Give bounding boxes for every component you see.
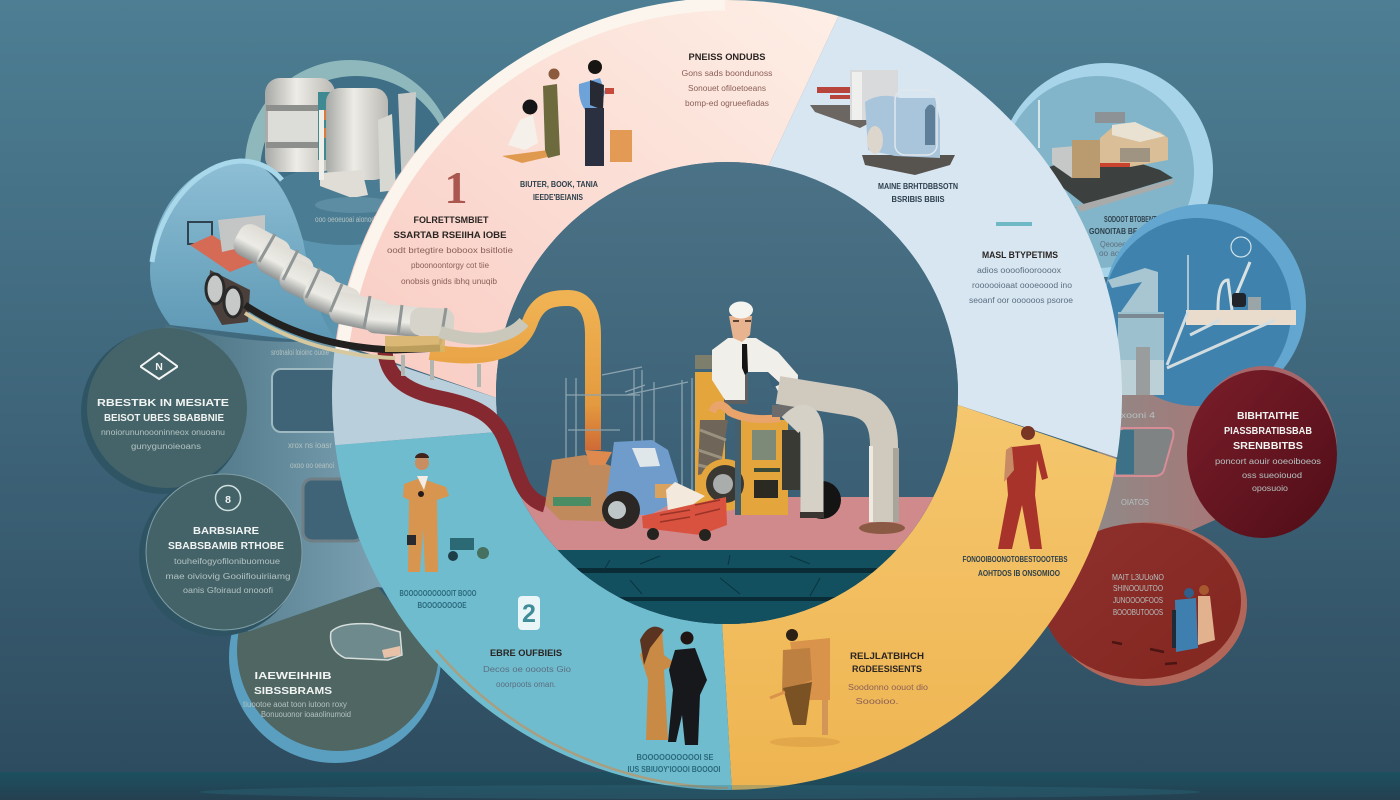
panel: left dark circle one <box>81 328 247 494</box>
number two badge: 2 <box>522 600 536 628</box>
icon: worker torso <box>712 302 798 417</box>
icon: yellow loader <box>695 355 841 519</box>
text: yellow top caption <box>962 555 1068 578</box>
text: pale blue block: MASL BTYPETIMS <box>982 250 1058 261</box>
icon: inner gray pipe <box>790 416 812 515</box>
text: pale blue block: roooooioaat oooeoood ino <box>972 281 1073 290</box>
icon: scaffold frames <box>566 367 692 520</box>
icon: hexagon badge: N <box>155 361 163 373</box>
panel: dark red circle: PIASSBRATIBSBAB <box>1224 425 1312 437</box>
panel: right connector band: exooni 4 <box>1115 411 1156 420</box>
bottom glow <box>200 785 1200 799</box>
floor <box>520 497 933 550</box>
panel: dark red circle: oposuoio <box>1252 484 1289 493</box>
text: people caption: IEEDE'BEIANIS <box>533 193 584 202</box>
panel: left dark circle one: gunygunoieoans <box>131 442 201 451</box>
text: step one: oodt brtegtire boboox bsitlotie <box>387 246 514 255</box>
panel: upper-left machine circle <box>245 60 455 340</box>
text: pale blue block: adios oooofiooroooox <box>977 266 1061 275</box>
panel: bottom-left circle: SIBSSBRAMS <box>254 685 332 697</box>
text: building caption: oo aoonoe ooiio <box>1099 249 1158 258</box>
segment: pink <box>336 0 838 398</box>
number two badge <box>518 596 540 630</box>
icon: tower column <box>1108 268 1164 395</box>
icon: ring badge: 8 <box>225 494 231 506</box>
panel: central hole scene <box>490 160 970 630</box>
segment: pale wedge <box>332 346 497 446</box>
panel: bottom-left circle: tiuootoe aoat toon iutoon roxy <box>243 700 347 709</box>
panel: dark red circle: oss sueoiouod <box>1242 471 1302 480</box>
panel: dark red circle: SRENBBITBS <box>1233 440 1303 452</box>
icon: turbine drums <box>265 78 416 213</box>
heading: circle two: BARBSIARE <box>193 525 259 537</box>
panel: left connector band: xrox ns ioasr <box>288 441 332 450</box>
text: top pink block: PNEISS ONDUBS <box>688 52 766 63</box>
text: pale blue block <box>969 250 1074 305</box>
text: teal caption: BOOOOOOOOOOIT BOOO <box>400 589 476 598</box>
icon: blue truck <box>602 440 678 529</box>
text: step one: onobsis gnids ibhq unuqib <box>401 277 498 286</box>
text: red circle notes <box>1112 573 1164 617</box>
text: step one <box>387 215 514 286</box>
icon: teal overall worker <box>403 453 489 572</box>
panel: right connector band <box>1090 360 1240 580</box>
icon: red cart <box>642 482 727 541</box>
segment: yellow <box>722 405 1140 800</box>
icon: orange riser pipe <box>430 298 593 450</box>
pipeline segments <box>229 220 455 338</box>
text: yellow lower block <box>848 651 929 706</box>
panel: dark red circle <box>1187 366 1337 538</box>
text: yellow lower block: Soodonno oouot dio <box>848 683 929 692</box>
text: top pink block: Sonouet ofiloetoeans <box>688 84 766 93</box>
text: yellow top caption: AOHTDOS IB ONSOMIOO <box>978 569 1060 578</box>
text: teal block: Decos oe oooots Gio <box>483 665 572 674</box>
panel: left dark circle two: touheifogyofilonibuomoue <box>174 557 281 566</box>
panel: left connector band: oxoo oo oeanoi <box>290 461 334 470</box>
panel: right connector band: OIATOS <box>1121 498 1149 507</box>
icon: couple in robes <box>1172 585 1215 652</box>
panel: right blue crane circle <box>1103 204 1306 406</box>
icon: central construction scene <box>385 298 905 541</box>
text: yellow lower block: Soooioo. <box>856 697 898 706</box>
icon: red-overalls worker <box>998 426 1048 549</box>
text: red circle notes: SHINOOUUTOO <box>1113 584 1163 593</box>
icon: plant building <box>1038 100 1174 212</box>
dark base <box>558 550 896 624</box>
icon: couple shaking hands <box>640 627 707 745</box>
text: teal caption <box>400 589 476 610</box>
text: building caption: Qeooee o aoss <box>1100 240 1150 249</box>
text: yellow lower block: RGDEESISENTS <box>852 664 922 675</box>
panel: left dark circle two: SBABSBAMIB RTHOBE <box>168 540 284 552</box>
heading: bottom-left circle: IAEWEIHHIB <box>254 670 332 682</box>
panel: upper-right building circle <box>999 63 1213 277</box>
panel: bottom-left circle <box>229 587 440 763</box>
icon: hexagon badge <box>141 353 177 379</box>
icon: brick pile <box>545 455 625 522</box>
text: yellow top caption: FONOOIBOONOTOBESTOOOTEBS <box>962 555 1068 564</box>
text: people caption: BIUTER, BOOK, TANIA <box>520 180 598 189</box>
icon: capsule device <box>331 624 402 660</box>
text: pale blue machine caption: MAINE BRHTDBBSOTN <box>878 182 958 191</box>
text: step one: SSARTAB RSEIIHA IOBE <box>394 230 506 241</box>
text: top pink block: bomp-ed ogrueefiadas <box>685 99 769 108</box>
text: pale blue machine caption <box>878 182 958 204</box>
icon: upper-right ring machine <box>810 70 955 175</box>
text: couple caption <box>628 753 720 774</box>
text: red circle notes: BOOOBUTOOOS <box>1113 608 1163 617</box>
icon: truss and gauge <box>1167 237 1296 368</box>
text: top pink block <box>682 52 772 108</box>
panel: bottom-left circle: Bonuouonor ioaaolinumoid <box>261 710 351 719</box>
text: pale blue block: seoanf oor oooooos psoroe <box>969 296 1074 305</box>
panel: left connector band: srotnaloi loioinc ouole <box>271 348 329 357</box>
heading: circle one: RBESTBK IN MESIATE <box>97 397 229 409</box>
text: teal block <box>483 648 572 689</box>
text: people caption <box>520 180 598 202</box>
text: top pink block: Gons sads boondunoss <box>682 69 772 78</box>
panel: upper-left machine circle: ooo oeoeuoai aionod <box>315 215 375 224</box>
text: yellow lower block: RELJLATBIHCH <box>850 651 924 662</box>
icon: people in pink segment <box>502 60 632 166</box>
text: couple caption: IUS SBIUOY'IOOOI BOOOOI <box>628 765 720 774</box>
panel: red circle <box>1043 522 1247 686</box>
text: building caption: SODOOT BTOBENTIOS <box>1104 215 1166 224</box>
heading: dark red circle: BIBHTAITHE <box>1237 410 1299 422</box>
icon: pipeline truck <box>188 215 524 387</box>
text: red circle notes: JUNOOOOFOOS <box>1113 596 1163 605</box>
icon: small cart <box>448 538 489 561</box>
panel: left dark circle one: BEISOT UBES SBABBNIE <box>104 412 224 424</box>
number one: 1 <box>444 162 468 213</box>
icon: ring badge <box>216 486 240 510</box>
text: step one: FOLRETTSMBIET <box>414 215 489 226</box>
text: teal block: EBRE OUFBIEIS <box>490 648 562 659</box>
text: teal caption: BOOOOOOOOE <box>418 601 467 610</box>
panel: left dark circle one: nnoiorununoooninneox onuoanu <box>101 428 225 437</box>
panel: left connector band <box>165 325 400 640</box>
segment: teal <box>335 432 732 790</box>
text: red circle notes: MAIT L3UUoNO <box>1112 573 1164 582</box>
segment: pale blue <box>768 0 1140 465</box>
text: pale blue machine caption: BSRIBIS BBIIS <box>892 195 945 204</box>
icon: gray pipe <box>778 390 884 522</box>
panel: left dark circle two: oanis Gfoiraud onooofi <box>183 586 273 595</box>
text: building caption <box>1089 215 1177 258</box>
panel: left dark circle two <box>139 474 302 636</box>
panel: dark red circle: poncort aouir ooeoiboeos <box>1215 457 1321 466</box>
panel: blue truck circle <box>150 160 340 345</box>
accent dash <box>996 222 1032 226</box>
icon: red pipe <box>385 352 545 505</box>
icon: walker with sack <box>770 629 840 747</box>
text: teal block: ooorpoots oman. <box>496 680 556 689</box>
panel: left dark circle two: mae oiviovig Gooiifiouiriiamg <box>166 572 290 581</box>
text: step one: pboonoontorgy cot tiie <box>411 261 490 270</box>
text: building caption: GONOITAB BE annoooone <box>1089 227 1177 236</box>
panel: process ring <box>300 0 1140 800</box>
text: couple caption: BOOOOOOOOOOI SE <box>636 753 714 762</box>
